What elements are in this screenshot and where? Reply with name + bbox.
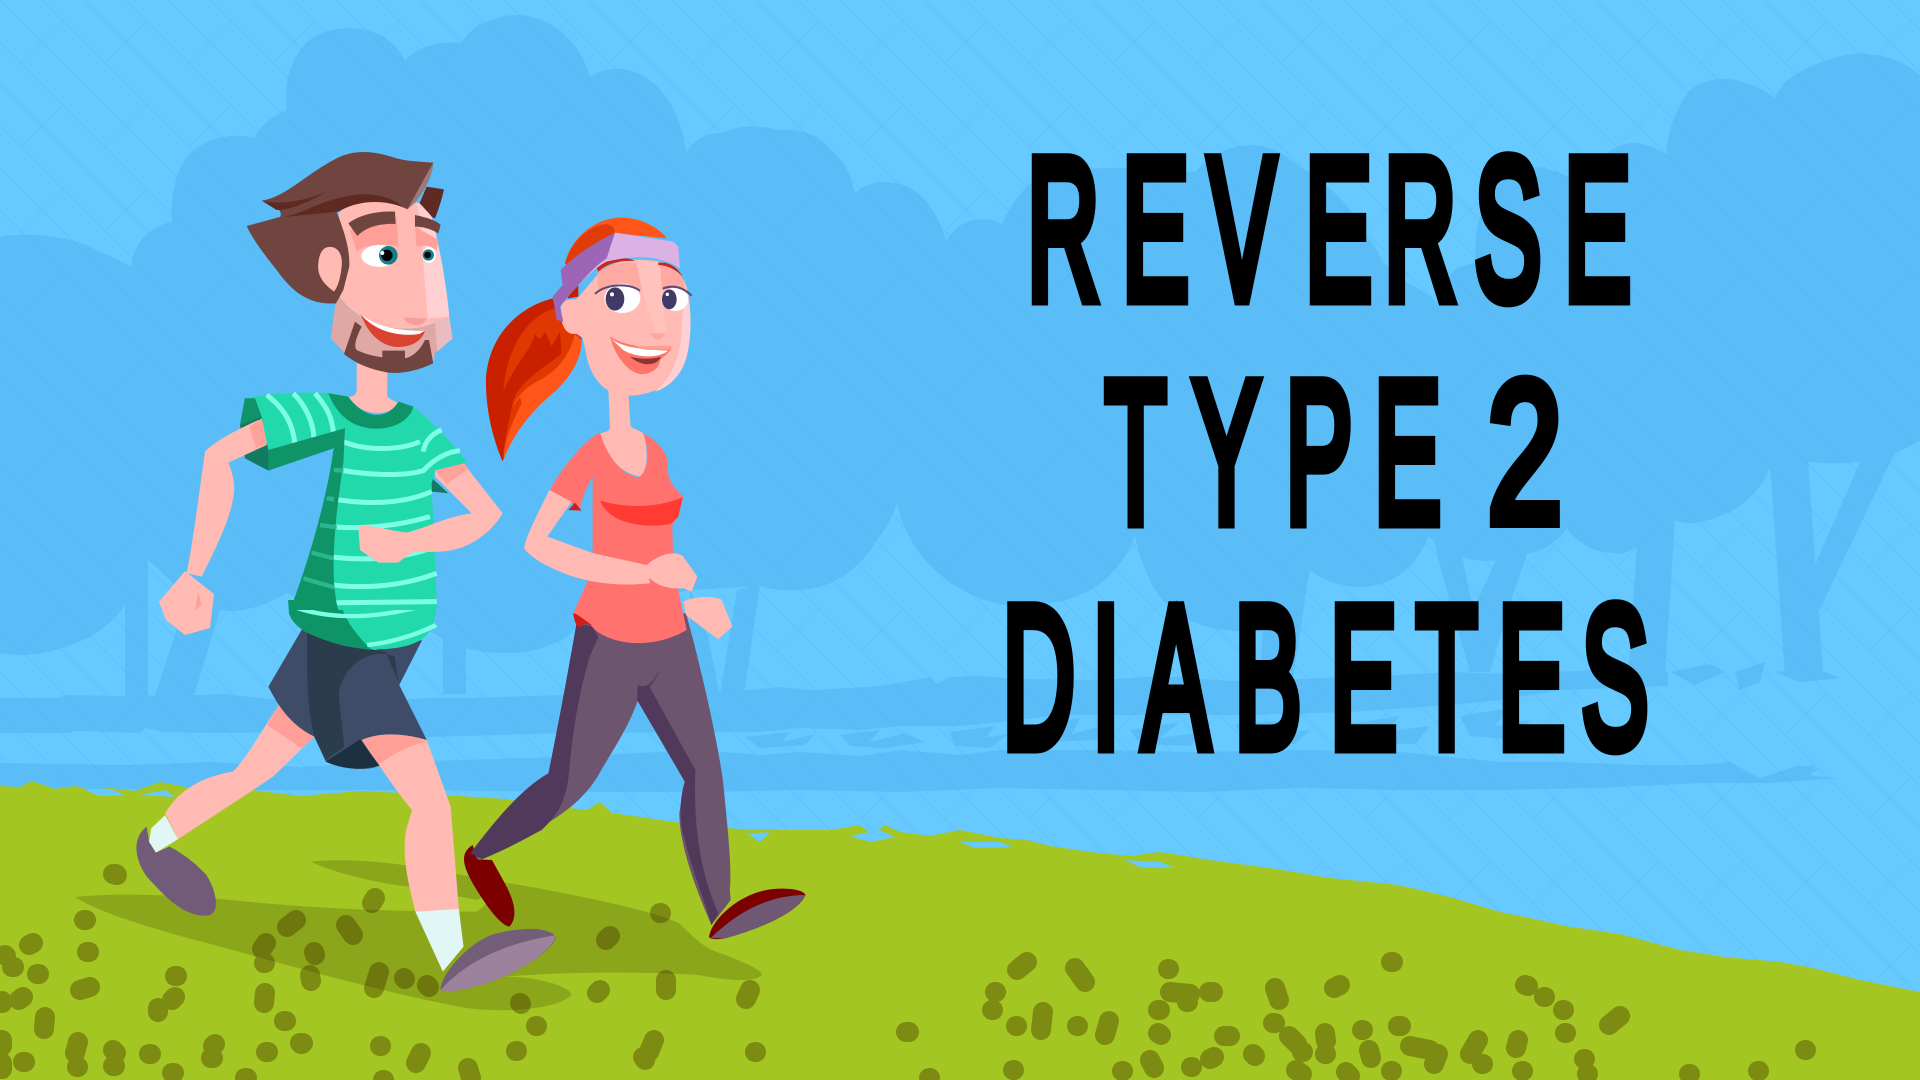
woman pants [473,613,731,925]
ground haze band [0,670,1840,792]
man hair shade [262,192,407,217]
man shorts shade [307,620,398,760]
woman mouth inside [630,357,661,364]
ground speckle clusters [2,874,1806,1080]
haze streak [0,680,1862,778]
man upper arm shade [249,418,268,448]
man front sock [415,909,464,972]
man neck [348,363,398,413]
numeral 2: 2 [1487,341,1562,565]
man ear [318,247,342,292]
man collar [328,393,413,429]
woman ponytail mid [503,308,575,457]
woman face [561,260,690,396]
man shorts [268,620,427,769]
man back sock [149,815,178,853]
man face [337,199,449,329]
runner: man [136,152,556,991]
woman sleeve underside [568,503,582,511]
man shirt hem [288,600,437,649]
ground shadows of runners [75,860,762,1010]
man shirt side panel [290,428,345,610]
woman pants shade left [470,613,598,859]
runner: woman [464,218,806,939]
man sleeve band [268,428,345,471]
man back hair [417,187,444,218]
man hem shade [288,600,372,650]
man right eye [422,247,436,263]
man left arm [187,420,267,577]
man chest fist [358,526,415,563]
man back knee shade [267,705,314,748]
woman lower fist [683,597,732,639]
woman headband shade [553,233,615,322]
man left fist [159,571,214,635]
title line 1: REVERSE [1027,116,1631,342]
man beard [344,322,433,373]
man sleeve cuff top [240,398,262,425]
man fist crease [195,592,202,610]
eye white [361,245,397,267]
man right arm [407,465,503,552]
iris [423,249,434,261]
woman chest fist [647,553,697,592]
man back shoe [136,827,216,916]
man front shoe [441,929,556,991]
man top hair [262,152,433,217]
woman rear shoe [464,845,514,927]
man lower body [136,600,556,991]
man sleeve inner [240,398,273,471]
man left eyebrow [348,211,396,236]
man stubble highlight [435,317,453,352]
iris [662,289,677,309]
trees canopy [0,15,1920,655]
woman left eye [604,284,640,313]
eye white [662,288,688,311]
glint [610,292,614,296]
woman hem underside [573,613,592,627]
woman pants overlap shade [572,625,598,660]
man hem stripes [294,602,436,645]
woman front shoe [709,889,806,939]
man back leg [165,705,314,839]
woman ear [561,299,585,334]
woman neck [600,390,647,477]
glint [666,293,669,296]
man hair highlight [407,163,433,209]
man nose tip [403,318,427,325]
man left eye [361,245,398,267]
man teeth [361,314,425,335]
man shorts hem [326,739,379,769]
woman upper body [486,218,732,660]
man right cuff shade [435,463,468,484]
man shirt stripes [267,393,460,603]
man under sleeve [427,473,448,493]
word TYPE: TYPE [1105,339,1441,565]
grass edge slivers [85,789,1175,868]
man upper body [159,152,503,635]
woman eyelids [597,263,687,293]
woman hair shade [565,224,615,270]
haze fragments [745,662,1840,780]
iris [379,246,398,265]
pupil [424,252,431,258]
title [1002,116,1649,790]
woman upper lip [633,346,672,350]
woman under hair [567,282,578,298]
woman face highlight [655,280,691,392]
pupil [381,250,393,261]
trees trunks [125,452,1895,702]
woman nose tip [650,333,665,340]
background tree silhouettes [0,15,1920,792]
woman headband [561,233,680,298]
man shirt [245,393,467,610]
title line 3: DIABETES [1002,564,1649,790]
man stubble [331,295,453,363]
man shoe sole [441,935,556,991]
woman pants overlap [572,624,693,660]
woman pants shade inner [637,665,718,925]
eye white [604,284,640,313]
woman legs [464,613,806,939]
man panel stripes [303,470,343,587]
iris [606,287,624,311]
grass hill [0,781,1920,1080]
woman eyebrows [597,258,683,277]
glint [380,251,384,255]
man head [247,152,453,373]
man face highlight [416,202,449,318]
woman nose shade [637,260,666,333]
man left eyelid [350,217,398,252]
woman teeth [611,338,668,356]
woman head [553,233,692,396]
man front leg [362,734,459,912]
man mouth [361,314,425,347]
woman shirt [550,432,687,647]
woman shoe top [711,895,806,938]
woman shirt band [600,497,683,526]
man front knee shade [362,735,427,765]
woman arm [524,490,650,585]
woman lashes [595,285,692,296]
woman mouth [610,337,672,374]
eye white [422,247,436,263]
woman right eye [662,288,688,311]
title line 2 [1105,339,1562,565]
man right eyebrow [415,215,441,233]
woman ponytail light [503,333,582,460]
woman ponytail [486,298,582,462]
woman hair top [565,218,667,263]
man side hair [247,212,349,303]
man right eyelid [415,227,438,250]
